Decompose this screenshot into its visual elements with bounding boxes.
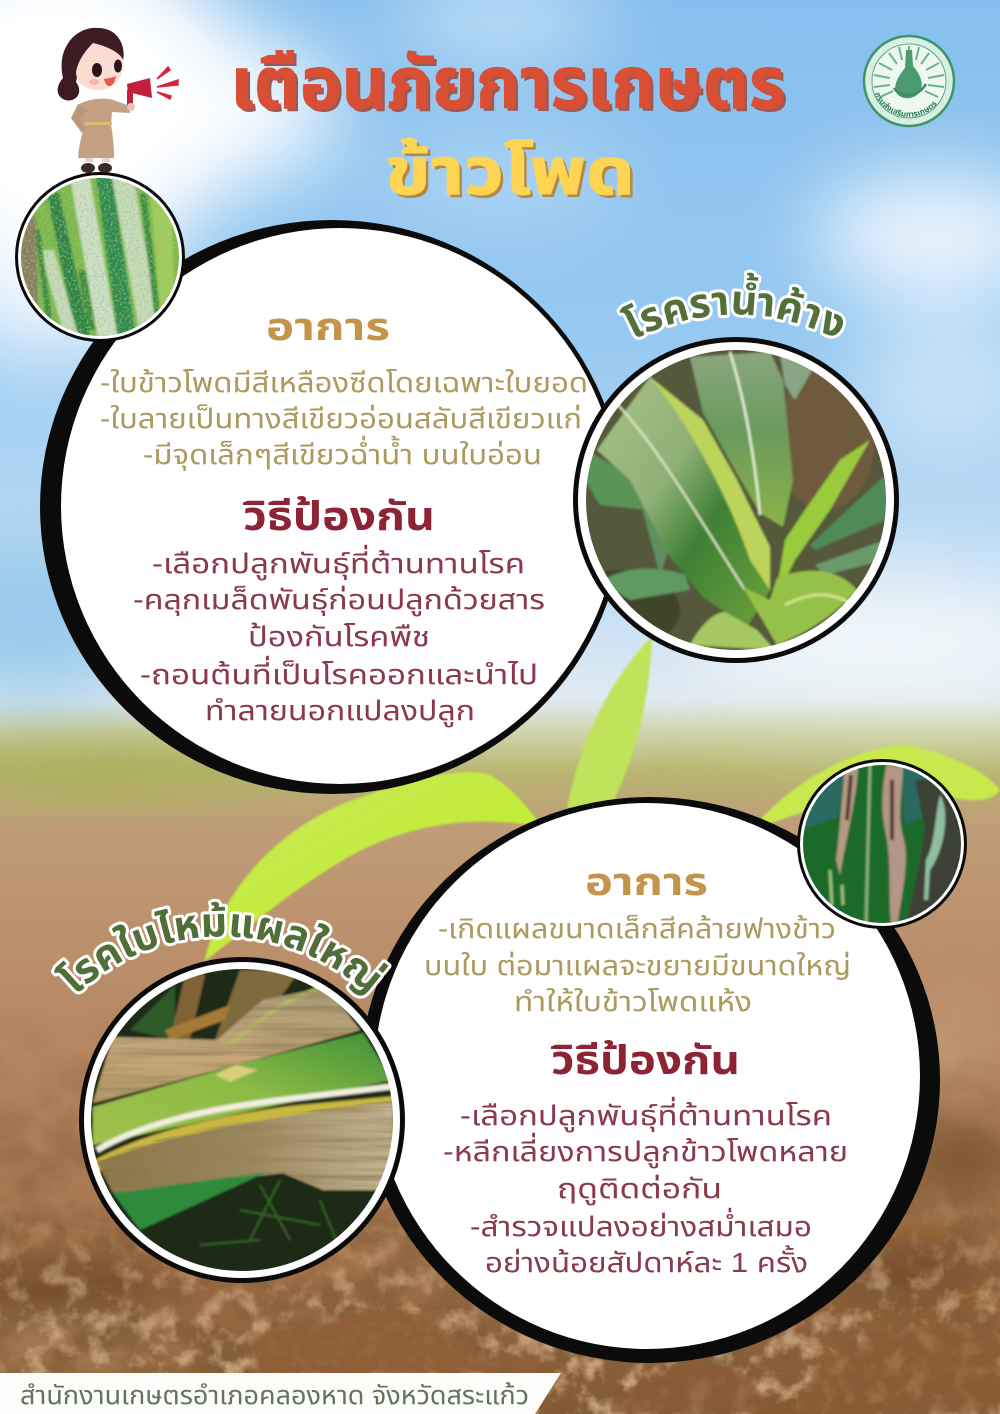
heading: symptoms: อาการ <box>266 307 390 349</box>
logo: department seal: กรมส่งเสริมการเกษตร <box>874 92 936 117</box>
icon: megaphone <box>127 67 178 111</box>
corn seedling leaves <box>204 636 1000 962</box>
panel: downy mildew info circle <box>40 220 624 794</box>
panel frame <box>40 220 624 794</box>
mascot eyes and mouth <box>89 60 122 86</box>
text block: prevention <box>443 1096 848 1278</box>
subtitle: ข้าวโพด <box>388 137 638 211</box>
text block: symptoms: -ใบลายเป็นทางสีเขียวอ่อนสลับสีเขียวแก่ <box>100 403 582 434</box>
mascot hair <box>58 28 124 101</box>
text block: prevention: -เลือกปลูกพันธุ์ที่ต้านทานโรค <box>152 544 525 581</box>
heading: symptoms: อาการ <box>585 862 708 904</box>
title: เตือนภัยการเกษตร <box>234 47 788 127</box>
photo: close-up of mildew-striped leaf <box>15 172 185 342</box>
heading: prevention: วิธีป้องกัน <box>242 495 435 539</box>
mascot uniform <box>76 99 130 158</box>
label: northern leaf blight name: โรคใบไหม้แผลใหญ่ <box>51 898 392 999</box>
mascot face <box>76 43 123 90</box>
text block: prevention: ป้องกันโรคพืช <box>248 621 430 652</box>
photo: northern leaf blight <box>79 957 405 1283</box>
photo: leaf lesion close-up <box>797 759 967 930</box>
text block: symptoms: -เกิดแผลขนาดเล็กสีคล้ายฟางข้าว <box>438 913 836 944</box>
text block: prevention: -หลีกเลี่ยงการปลูกข้าวโพดหลาย <box>443 1132 848 1169</box>
text block: symptoms <box>100 367 588 471</box>
text block: prevention: -ถอนต้นที่เป็นโรคออกและนำไป <box>140 655 538 690</box>
text block: symptoms: -ใบข้าวโพดมีสีเหลืองซีดโดยเฉพาะใบยอด <box>100 367 588 398</box>
footer banner <box>0 1373 561 1414</box>
text block: prevention: -คลุกเมล็ดพันธุ์ก่อนปลูกด้วยสาร <box>133 584 545 617</box>
text block: symptoms: ทำให้ใบข้าวโพดแห้ง <box>514 986 752 1017</box>
mascot belt <box>85 122 112 125</box>
text block: prevention: -เลือกปลูกพันธุ์ที่ต้านทานโรค <box>460 1096 832 1133</box>
mascot arm on hip <box>71 104 88 133</box>
text block: prevention: อย่างน้อยสัปดาห์ละ 1 ครั้ง <box>485 1245 808 1278</box>
title: เตือนภัยการเกษตร <box>230 44 786 124</box>
panel: northern leaf blight info circle <box>360 797 940 1363</box>
text block: prevention: ทำลายนอกแปลงปลูก <box>205 695 475 728</box>
footer banner: สำนักงานเกษตรอำเภอคลองหาด จังหวัดสระแก้ว <box>20 1380 529 1410</box>
text block: prevention: -สำรวจแปลงอย่างสม่ำเสมอ <box>470 1207 812 1242</box>
heading: prevention: วิธีป้องกัน <box>550 1039 740 1083</box>
text block: prevention: ฤดูติดต่อกัน <box>557 1173 722 1206</box>
subtitle: ข้าวโพด <box>385 134 635 208</box>
mascot: woman with megaphone <box>58 28 178 173</box>
mascot legs and shoes <box>81 150 112 173</box>
text block: symptoms: บนใบ ต่อมาแผลจะขยายมีขนาดใหญ่ <box>424 950 851 981</box>
label: downy mildew name: โรคราน้ำค้าง <box>616 270 846 340</box>
logo: department seal <box>862 34 956 128</box>
panel frame <box>360 797 940 1363</box>
text block: symptoms <box>424 913 851 1017</box>
text block: symptoms: -มีจุดเล็กๆสีเขียวฉ่ำน้ำ บนใบอ่อน <box>143 435 542 471</box>
photo: downy mildew corn plant <box>560 337 899 663</box>
text block: prevention <box>133 544 545 728</box>
